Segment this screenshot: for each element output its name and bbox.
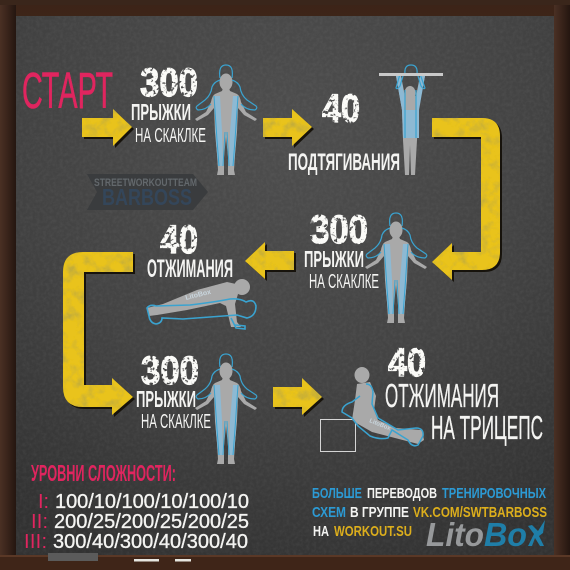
- label: jumps: ПРЫЖКИ: [131, 99, 191, 125]
- line 1: [312, 485, 546, 502]
- level 3: III:: [24, 531, 47, 553]
- legend: difficulty levels: [24, 460, 249, 553]
- logo: LitoBox: [426, 516, 545, 553]
- line 3: НА: [313, 523, 329, 540]
- count 40: 40: [322, 87, 360, 131]
- step 4: push-ups: [147, 218, 256, 329]
- label: pull-ups: ПОДТЯГИВАНИЯ: [288, 149, 400, 176]
- icon: dip figure: [342, 367, 424, 446]
- icon: bench box: [320, 420, 356, 452]
- logo: LitoBox: Lito: [426, 516, 484, 553]
- step 1: jumps: [131, 61, 257, 175]
- label: jumps: ПРЫЖКИ: [136, 386, 196, 412]
- line 2: СХЕМ: [312, 504, 346, 521]
- icon: jumping figure: [195, 65, 257, 175]
- icon: jumping figure: [365, 213, 427, 323]
- arrow: bend right: [432, 118, 502, 282]
- watermark: BarBoss team: STREETWORKOUTTEAM: [94, 177, 197, 189]
- level 2: II:: [31, 511, 48, 533]
- label: jumps: ПРЫЖКИ: [304, 246, 364, 272]
- level 2: 200/25/200/25/200/25: [54, 511, 249, 533]
- count 40: 40: [388, 341, 426, 385]
- label: rope: НА СКАКЛКЕ: [141, 411, 211, 433]
- level 1: I:: [38, 491, 49, 513]
- line 2: [312, 504, 547, 521]
- line 2: В ГРУППЕ: [350, 504, 409, 521]
- count 40: 40: [160, 218, 198, 262]
- step 3: jumps: [304, 208, 427, 323]
- count 300: 300: [141, 349, 199, 393]
- step 2: pull-ups: [288, 65, 443, 176]
- arrow: jumps to triceps dips: [273, 378, 324, 417]
- watermark: BarBoss team: [87, 174, 208, 210]
- count 300: 300: [310, 208, 368, 252]
- chalk tray items: [48, 553, 191, 562]
- step 6: triceps dips: [320, 341, 543, 452]
- text block: more translations: [312, 485, 547, 540]
- arrow: bend left: [63, 252, 135, 417]
- step 5: jumps: [136, 349, 257, 464]
- line 3: [313, 523, 412, 540]
- level 1: 100/10/100/10/100/10: [55, 491, 249, 513]
- level 3: 300/40/300/40/300/40: [53, 531, 248, 553]
- icon: push-up figure: LitoBox: [185, 289, 212, 302]
- arrow: start to jumps: [82, 109, 134, 148]
- icon: dip figure: LitoBox: [368, 418, 392, 432]
- line 1: БОЛЬШЕ: [312, 485, 362, 502]
- arrow: jumps to pull-ups: [263, 109, 314, 148]
- logo: LitoBox: Bo: [484, 516, 527, 553]
- line 1: ПЕРЕВОДОВ: [367, 485, 437, 502]
- title: start: СТАРТ: [22, 62, 113, 119]
- label: push-ups: ОТЖИМАНИЯ: [147, 255, 233, 283]
- label: rope: НА СКАКЛКЕ: [309, 271, 379, 293]
- label: rope: НА СКАКЛКЕ: [135, 125, 206, 147]
- icon: jumping figure: [195, 354, 257, 464]
- line 3: WORKOUT.SU: [334, 523, 412, 540]
- count 300: 300: [140, 61, 198, 105]
- icon: pull-up figure: [379, 65, 443, 175]
- arrow: jumps to push-ups: [245, 242, 296, 281]
- watermark: BarBoss team: BARBOSS: [102, 184, 192, 210]
- legend heading: УРОВНИ СЛОЖНОСТИ:: [31, 460, 176, 486]
